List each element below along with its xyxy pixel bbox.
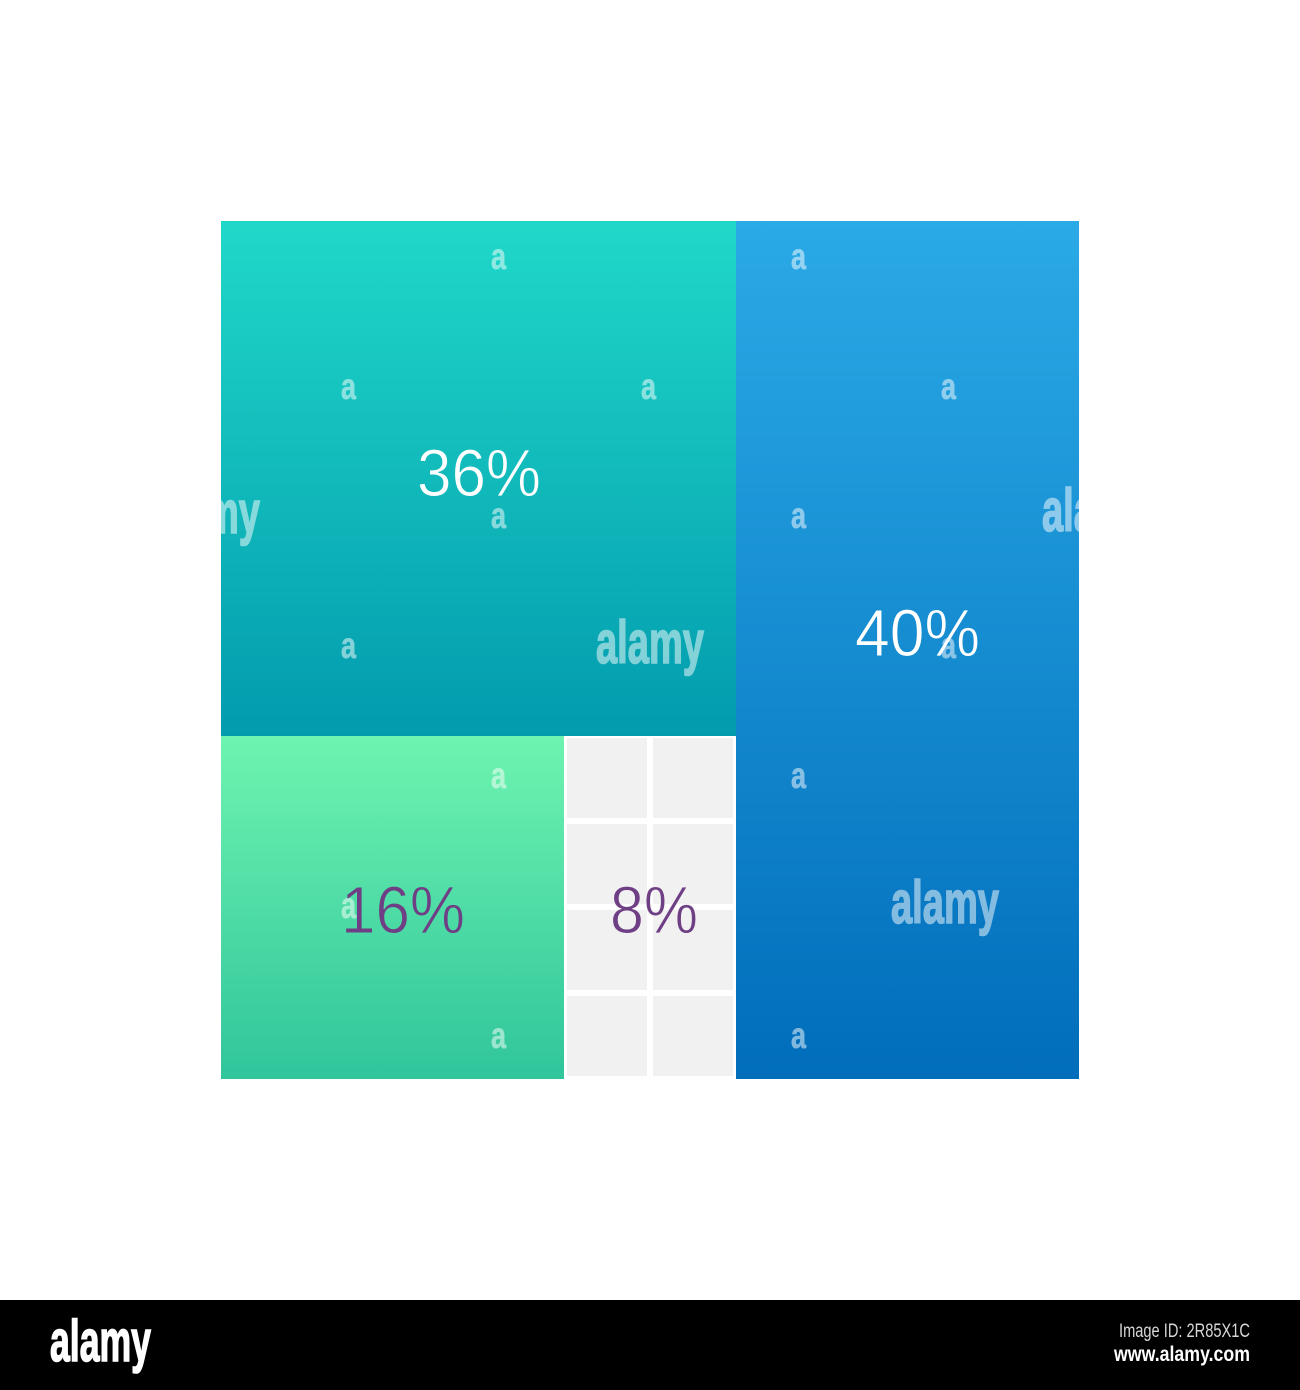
- footer image id: Image ID: 2R85X1C: [1119, 1321, 1250, 1342]
- watermark: repeated alamy marks: a: [491, 755, 506, 796]
- watermark: repeated alamy marks: a: [791, 755, 806, 796]
- label: 36%: 36%: [417, 436, 541, 511]
- label: 40%: 40%: [855, 596, 980, 671]
- panel: 40% blue block: [736, 221, 1079, 1079]
- watermark: repeated alamy marks: a: [941, 366, 956, 407]
- watermark: repeated alamy marks: alamy: [891, 869, 999, 936]
- watermark: repeated alamy marks: a: [491, 236, 506, 277]
- label: 16%: 16%: [341, 873, 465, 948]
- watermark: repeated alamy marks: a: [341, 366, 356, 407]
- watermark: repeated alamy marks: alamy: [1042, 477, 1150, 544]
- watermark: repeated alamy marks: a: [791, 495, 806, 536]
- panel: 16% green block: [221, 736, 564, 1079]
- watermark: repeated alamy marks: a: [791, 1015, 806, 1056]
- watermark: repeated alamy marks: alamy: [152, 479, 260, 546]
- panel: 8% grey grid block: [567, 738, 733, 1076]
- footer: black stock-photo bar: [0, 1300, 1300, 1390]
- watermark: repeated alamy marks: a: [941, 625, 956, 666]
- watermark: repeated alamy marks: a: [341, 625, 356, 666]
- watermark: repeated alamy marks: a: [341, 885, 356, 926]
- watermark: repeated alamy marks: a: [641, 366, 656, 407]
- watermark: repeated alamy marks: [221, 249, 1079, 1048]
- watermark: repeated alamy marks: a: [491, 1015, 506, 1056]
- watermark: repeated alamy marks: a: [791, 236, 806, 277]
- label: 8%: 8%: [610, 873, 698, 948]
- footer url: www.alamy.com: [1113, 1343, 1250, 1366]
- footer logo: alamy: [50, 1309, 151, 1374]
- panel: 36% teal block: [221, 221, 736, 736]
- watermark: repeated alamy marks: alamy: [596, 609, 704, 676]
- watermark: repeated alamy marks: a: [491, 495, 506, 536]
